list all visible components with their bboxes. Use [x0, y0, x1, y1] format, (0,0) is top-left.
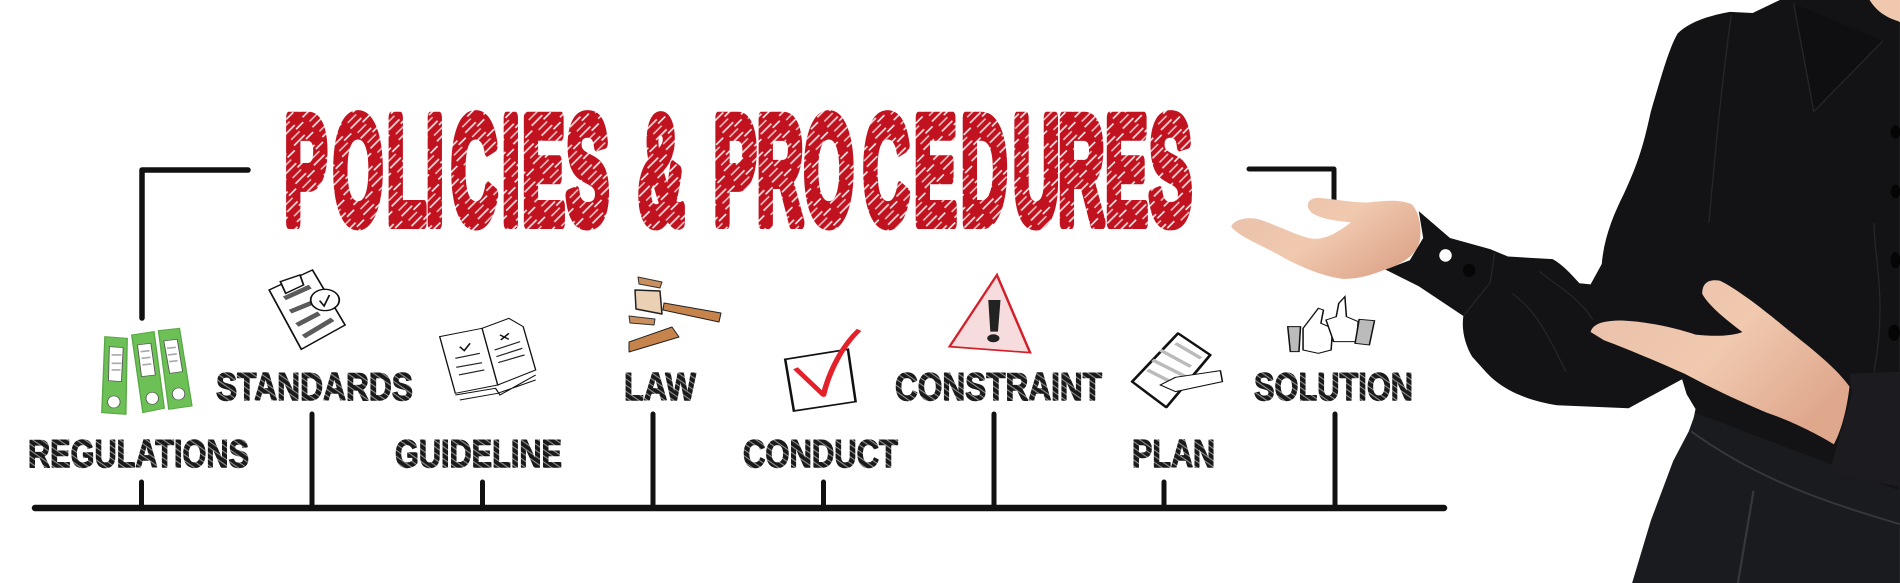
leather skirt and belt [1632, 413, 1900, 583]
cuff buttons [1439, 249, 1475, 277]
icon: plan sheet and pencil [1132, 333, 1222, 407]
label: law: LAW [624, 366, 696, 409]
right arm sleeve [1829, 372, 1900, 487]
title: POLICIES & PROCEDURES [284, 85, 1192, 256]
icon: gavel [629, 277, 721, 352]
icon: clipboard with badge [269, 270, 345, 349]
timeline axis with ticks [35, 414, 1444, 508]
person presenting with both hands [1231, 0, 1900, 583]
label: solution: SOLUTION [1254, 366, 1413, 409]
label: regulations: REGULATIONS [28, 433, 249, 476]
icon: green binders [102, 328, 192, 414]
icon: checkbox with red tick [785, 330, 859, 411]
upper hand [1231, 198, 1421, 279]
neck [1870, 0, 1900, 22]
label: plan: PLAN [1132, 433, 1215, 476]
sleeve folds [1463, 15, 1880, 372]
collar [1794, 4, 1883, 112]
icon: open book [440, 318, 536, 400]
right title bracket [1249, 169, 1334, 200]
label: constraint: CONSTRAINT [895, 366, 1102, 409]
belt highlight [1691, 431, 1900, 583]
lower hand [1591, 280, 1850, 444]
label: conduct: CONDUCT [743, 433, 898, 476]
blouse and sleeve [1385, 0, 1900, 528]
blouse buttons [1888, 125, 1900, 341]
label: standards: STANDARDS [216, 366, 413, 409]
icon: warning triangle [949, 275, 1030, 353]
icon: thumbs up [1288, 297, 1374, 353]
left title bracket [142, 170, 248, 318]
label: guideline: GUIDELINE [395, 433, 562, 476]
